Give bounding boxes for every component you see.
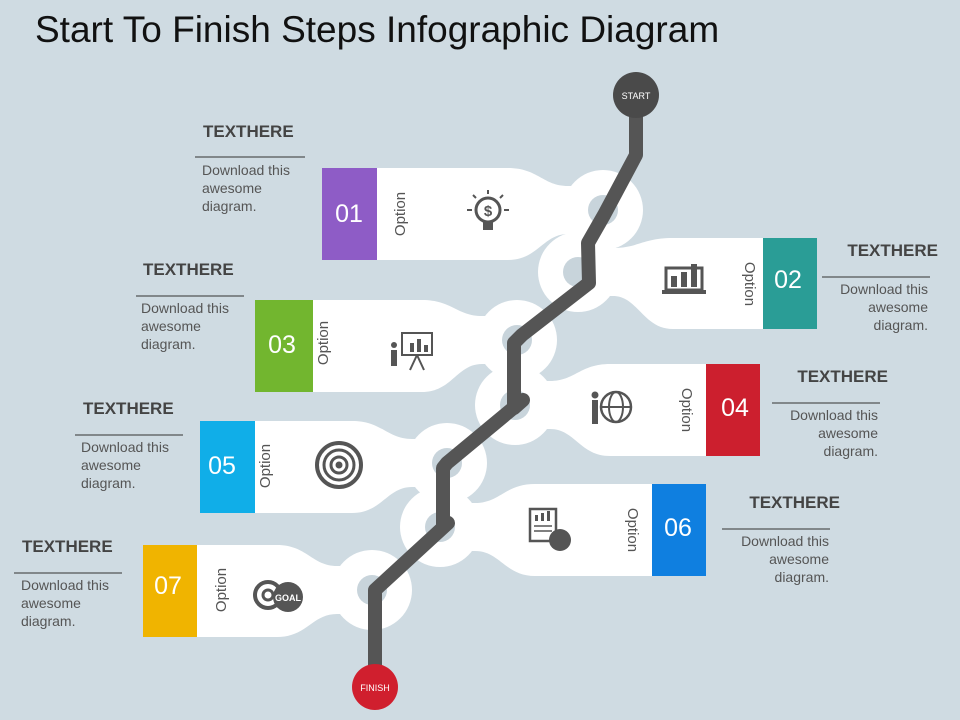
option labels: Option <box>392 192 409 236</box>
text blocks: TEXTHERE <box>203 122 294 141</box>
number squares: 04 <box>721 394 749 422</box>
option labels: Option <box>741 262 758 306</box>
number squares: 03 <box>268 331 296 359</box>
option labels: Option <box>213 568 230 612</box>
text blocks: TEXTHERE <box>797 367 888 386</box>
text blocks: awesome <box>868 299 928 315</box>
text blocks: TEXTHERE <box>749 493 840 512</box>
number squares: 05 <box>208 452 236 480</box>
text blocks: Download this <box>202 162 290 178</box>
text blocks: awesome <box>141 318 201 334</box>
text blocks: Download this <box>21 577 109 593</box>
icons: GOAL <box>275 593 302 603</box>
text blocks: diagram. <box>874 317 928 333</box>
start marker <box>613 72 659 118</box>
text blocks: Download this <box>741 533 829 549</box>
option labels: Option <box>315 321 332 365</box>
option labels: Option <box>257 444 274 488</box>
icons: $ <box>484 203 493 220</box>
number squares: 07 <box>154 572 182 600</box>
text blocks: TEXTHERE <box>847 241 938 260</box>
number squares <box>143 168 817 637</box>
text blocks <box>14 122 938 629</box>
text blocks: Download this <box>840 281 928 297</box>
title: Start To Finish Steps Infographic Diagram <box>35 9 719 50</box>
text blocks: TEXTHERE <box>22 537 113 556</box>
road path <box>375 95 636 687</box>
text blocks: awesome <box>81 457 141 473</box>
number squares: 02 <box>774 266 802 294</box>
option labels <box>213 192 758 612</box>
option labels: Option <box>624 508 641 552</box>
text blocks: diagram. <box>824 443 878 459</box>
text blocks: Download this <box>790 407 878 423</box>
text blocks: diagram. <box>775 569 829 585</box>
text blocks: TEXTHERE <box>83 399 174 418</box>
tag shapes <box>197 168 763 637</box>
text blocks: awesome <box>21 595 81 611</box>
text blocks: awesome <box>202 180 262 196</box>
number squares: 01 <box>335 200 363 228</box>
text blocks: diagram. <box>141 336 195 352</box>
icons <box>255 190 706 612</box>
finish marker <box>352 664 398 710</box>
text blocks: Download this <box>81 439 169 455</box>
option labels: Option <box>678 388 695 432</box>
text blocks: Download this <box>141 300 229 316</box>
text blocks: diagram. <box>21 613 75 629</box>
text blocks: awesome <box>769 551 829 567</box>
start marker: START <box>622 91 651 101</box>
text blocks: diagram. <box>81 475 135 491</box>
number squares: 06 <box>664 514 692 542</box>
text blocks: awesome <box>818 425 878 441</box>
text blocks: TEXTHERE <box>143 260 234 279</box>
finish marker: FINISH <box>360 683 390 693</box>
text blocks: diagram. <box>202 198 256 214</box>
